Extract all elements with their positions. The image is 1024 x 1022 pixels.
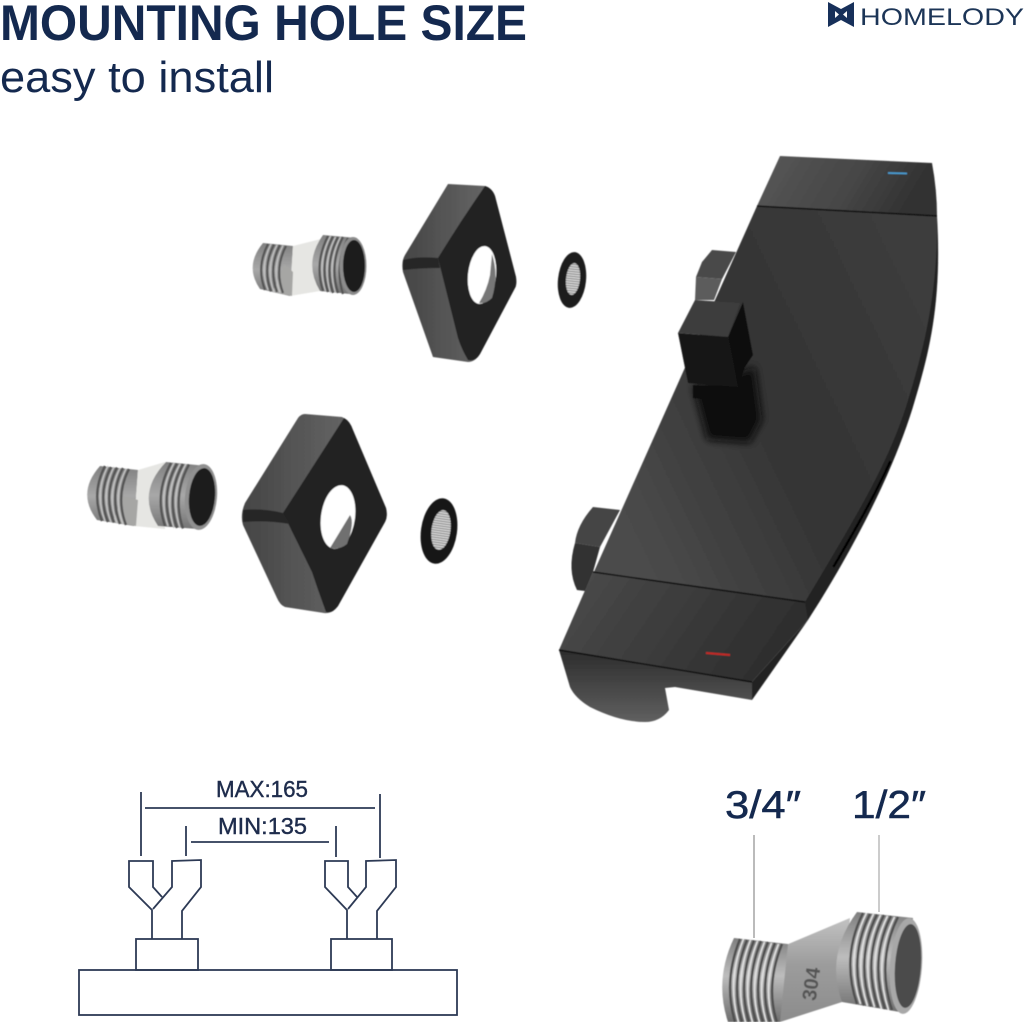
- upper pipe adapter: [253, 235, 366, 296]
- mounting dimension diagram: [79, 792, 457, 1015]
- logo wordmark: HOMELODY: [860, 4, 1024, 31]
- lower valve nut: [571, 507, 620, 591]
- max dimension label: MAX:165: [216, 776, 308, 802]
- handle shadow: [693, 367, 762, 443]
- gasket mesh: [564, 262, 582, 296]
- pipe opening: [340, 237, 366, 295]
- wall base: [79, 970, 457, 1015]
- size label 3/4 inch: 3/4″: [725, 784, 801, 827]
- brand logo: Homelody: [828, 2, 1024, 31]
- stainless steel fitting photo: [722, 912, 925, 1022]
- bottom cap top: [559, 572, 808, 682]
- upper filter gasket: [555, 251, 589, 309]
- red hot mark: [706, 653, 730, 655]
- bottom cap seam: [559, 572, 805, 682]
- blue cold mark: [888, 172, 907, 174]
- flange hole: [465, 245, 499, 305]
- leader line for 3/4 inch: [753, 835, 755, 938]
- icon: bow tie logo mark: [828, 2, 854, 27]
- left mounting block: [136, 939, 198, 970]
- fitting opening: [887, 917, 925, 1015]
- right thread: [836, 912, 913, 1012]
- upper square flange: [402, 184, 516, 362]
- stamped 304 marking: 304: [799, 965, 825, 1002]
- main curved plate: [593, 206, 937, 602]
- top cap seam: [757, 206, 937, 216]
- right Y connector: [325, 860, 396, 939]
- min dimension label: MIN:135: [218, 813, 307, 839]
- faucet mixer body: [559, 156, 938, 722]
- square handle: [678, 300, 753, 402]
- gasket mesh: [429, 509, 453, 551]
- lower pipe adapter: [87, 462, 220, 531]
- side band of curved body: [800, 216, 938, 620]
- lower filter gasket: [417, 496, 461, 566]
- upper valve nut: [695, 250, 736, 300]
- left thread: [722, 938, 788, 1022]
- slot in side band: [834, 462, 890, 566]
- right mounting block: [331, 939, 392, 970]
- bottom cap spout and front edge: [559, 650, 752, 722]
- min dimension lines: [186, 826, 336, 857]
- pipe opening: [182, 463, 220, 531]
- lower square flange: [242, 414, 387, 613]
- top cap: [757, 156, 937, 216]
- subtitle: easy to install: easy to install: [0, 53, 274, 102]
- size label 1/2 inch: 1/2″: [852, 784, 926, 827]
- left Y connector: [129, 860, 201, 939]
- bottom cap side: [752, 620, 808, 700]
- max dimension lines: [141, 792, 380, 858]
- fitting body: [770, 918, 850, 1022]
- flange hole: [317, 483, 359, 551]
- leader line for 1/2 inch: [878, 835, 880, 912]
